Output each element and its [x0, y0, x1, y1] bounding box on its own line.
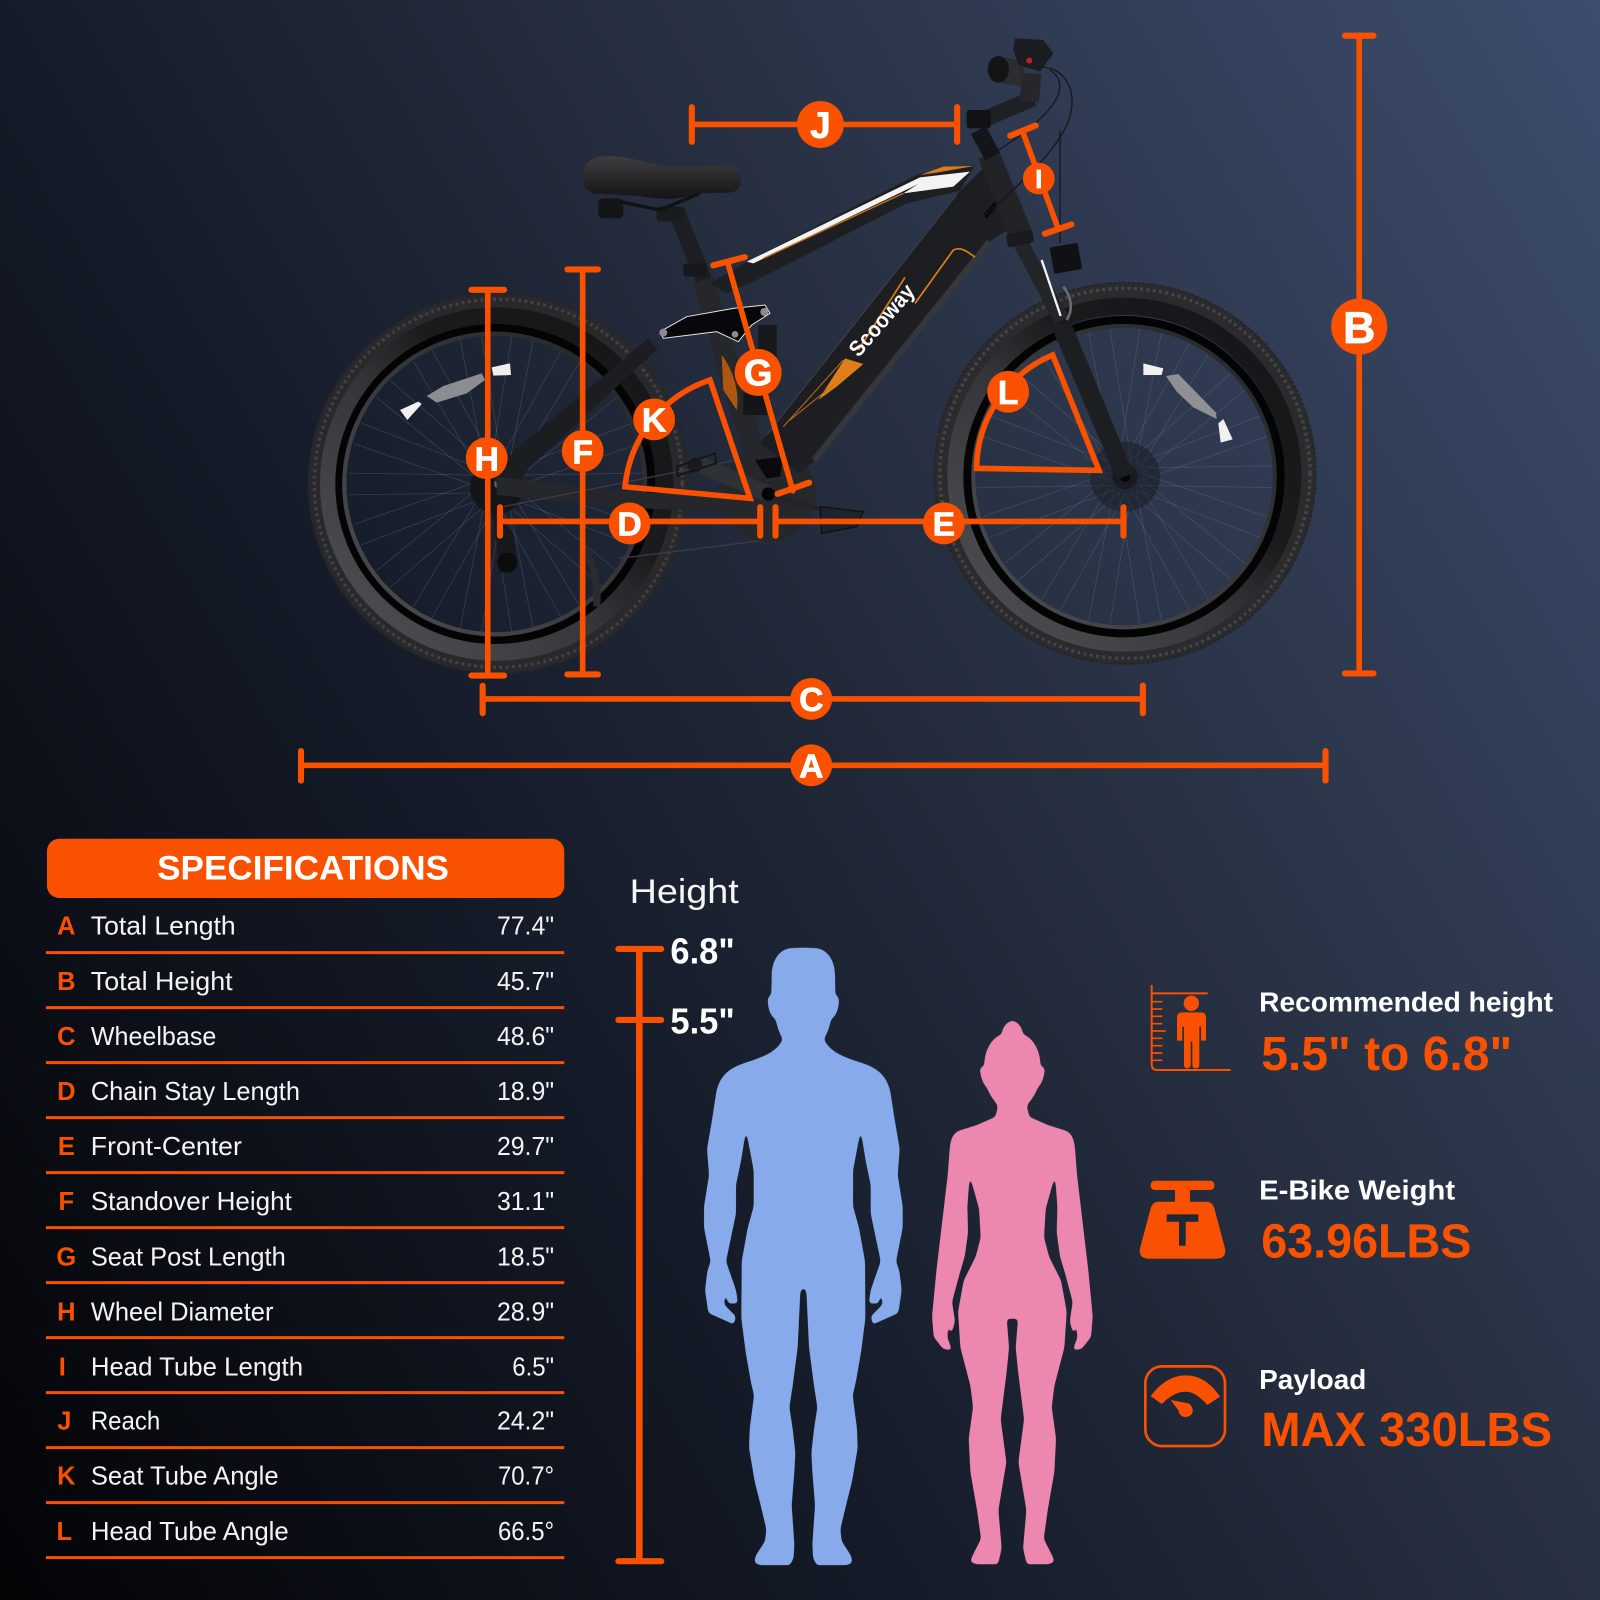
heading: height: Height	[630, 873, 739, 911]
value: MAX 330LBS	[1261, 1404, 1552, 1457]
front wheel	[934, 283, 1316, 664]
dimension F: standover height	[562, 269, 604, 674]
row E: 29.7"	[497, 1131, 554, 1161]
handlebar and controls	[967, 38, 1072, 243]
label: Recommended height	[1259, 987, 1553, 1018]
row I: Head Tube Length	[91, 1352, 303, 1382]
row B: B	[57, 968, 76, 996]
row K: Seat Tube Angle	[91, 1461, 279, 1491]
dimension D: chain stay length	[500, 503, 760, 544]
dimension G: seat post length	[713, 257, 809, 494]
dimension K: seat tube angle	[625, 380, 750, 498]
stat: e-bike weight	[1140, 1174, 1471, 1269]
row I	[46, 1352, 564, 1393]
row D: 18.9"	[497, 1076, 554, 1106]
value: 5.5" to 6.8"	[1261, 1028, 1512, 1081]
icon: weight scale	[1140, 1181, 1225, 1259]
male silhouette	[704, 948, 903, 1565]
row E: Front-Center	[91, 1131, 242, 1161]
dimension I: head tube length	[1010, 126, 1071, 234]
row H: H	[57, 1298, 76, 1326]
row G: G	[56, 1243, 76, 1271]
dimension L: head tube angle	[977, 355, 1099, 470]
dimension A: total length	[301, 744, 1326, 786]
panel: specifications table	[46, 839, 564, 1558]
row H: 28.9"	[497, 1296, 554, 1326]
row F: 31.1"	[497, 1186, 554, 1216]
rear shock and rocker link	[659, 305, 777, 415]
row H	[46, 1296, 564, 1338]
seat tube and seat post	[657, 207, 753, 450]
row A: A	[57, 913, 76, 941]
row B	[46, 966, 564, 1008]
row L: Head Tube Angle	[91, 1516, 289, 1546]
dimension J: reach: J	[810, 105, 831, 146]
height ruler	[618, 931, 735, 1561]
dimension C: wheelbase: C	[799, 682, 823, 719]
label: E-Bike Weight	[1259, 1174, 1455, 1205]
dimension F: standover height: F	[572, 434, 593, 471]
seat stay and chain stay	[493, 338, 770, 558]
row G	[46, 1241, 564, 1283]
row A: 77.4"	[497, 911, 554, 941]
row C: 48.6"	[497, 1021, 554, 1051]
specifications header: SPECIFICATIONS	[157, 850, 449, 888]
head tube and fork	[978, 153, 1133, 479]
row K	[46, 1461, 564, 1503]
rear wheel	[308, 293, 688, 673]
dimension A: total length: A	[799, 749, 823, 786]
row J: Reach	[91, 1406, 160, 1436]
row L: 66.5°	[498, 1516, 554, 1546]
frame and components	[493, 38, 1133, 558]
stat: recommended height	[1152, 985, 1553, 1081]
row B: Total Height	[91, 966, 233, 996]
dimension H: wheel diameter: H	[475, 441, 499, 478]
dimension B: total height	[1331, 36, 1387, 673]
row I: 6.5"	[512, 1352, 554, 1382]
label: Payload	[1259, 1364, 1366, 1395]
icon: gauge	[1145, 1366, 1225, 1446]
row G: 18.5"	[497, 1241, 554, 1271]
row C: C	[57, 1023, 76, 1051]
row K: K	[57, 1463, 76, 1491]
down tube with battery	[760, 163, 1013, 473]
row C	[46, 1021, 564, 1063]
female silhouette	[932, 1021, 1093, 1564]
row A	[46, 911, 564, 953]
dimension E: front-center	[776, 503, 1123, 544]
row E	[46, 1131, 564, 1173]
row C: Wheelbase	[91, 1021, 216, 1051]
row L	[46, 1516, 564, 1558]
row E: E	[58, 1133, 75, 1161]
row D	[46, 1076, 564, 1118]
dimension C: wheelbase	[483, 678, 1143, 720]
illustration: electric bicycle	[308, 38, 1316, 673]
dimension J: reach	[692, 101, 957, 148]
row H: Wheel Diameter	[91, 1296, 274, 1326]
brand logo: Scooway	[844, 278, 920, 361]
dimension L: head tube angle: L	[998, 375, 1018, 412]
top tube	[710, 165, 975, 293]
value: 63.96LBS	[1261, 1216, 1471, 1269]
seat	[583, 156, 741, 218]
ruler label 6.8: 6.8"	[670, 931, 735, 971]
row J: J	[57, 1408, 71, 1436]
dimension I: head tube length: I	[1035, 166, 1042, 194]
row J	[46, 1406, 564, 1448]
chainring and cranks	[677, 447, 863, 541]
stat: payload	[1145, 1364, 1552, 1457]
row D: D	[57, 1078, 76, 1106]
row I: I	[59, 1354, 66, 1382]
row F: F	[59, 1188, 74, 1216]
row G: Seat Post Length	[91, 1241, 286, 1271]
row J: 24.2"	[497, 1406, 554, 1436]
row F: Standover Height	[91, 1186, 293, 1216]
icon: height ruler with person	[1152, 985, 1231, 1070]
ruler label 5.5: 5.5"	[670, 1002, 735, 1042]
row A: Total Length	[91, 911, 236, 941]
row B: 45.7"	[497, 966, 554, 996]
dimension G: seat post length: G	[744, 353, 772, 394]
dimension E: front-center: E	[933, 507, 955, 544]
dimension K: seat tube angle: K	[642, 403, 666, 440]
row K: 70.7°	[498, 1461, 554, 1491]
row L: L	[56, 1518, 72, 1546]
specifications header	[47, 839, 564, 898]
dimension H: wheel diameter	[466, 290, 508, 676]
row F	[46, 1186, 564, 1228]
dimension B: total height: B	[1343, 302, 1375, 353]
dimension D: chain stay length: D	[617, 507, 642, 544]
row D: Chain Stay Length	[91, 1076, 300, 1106]
